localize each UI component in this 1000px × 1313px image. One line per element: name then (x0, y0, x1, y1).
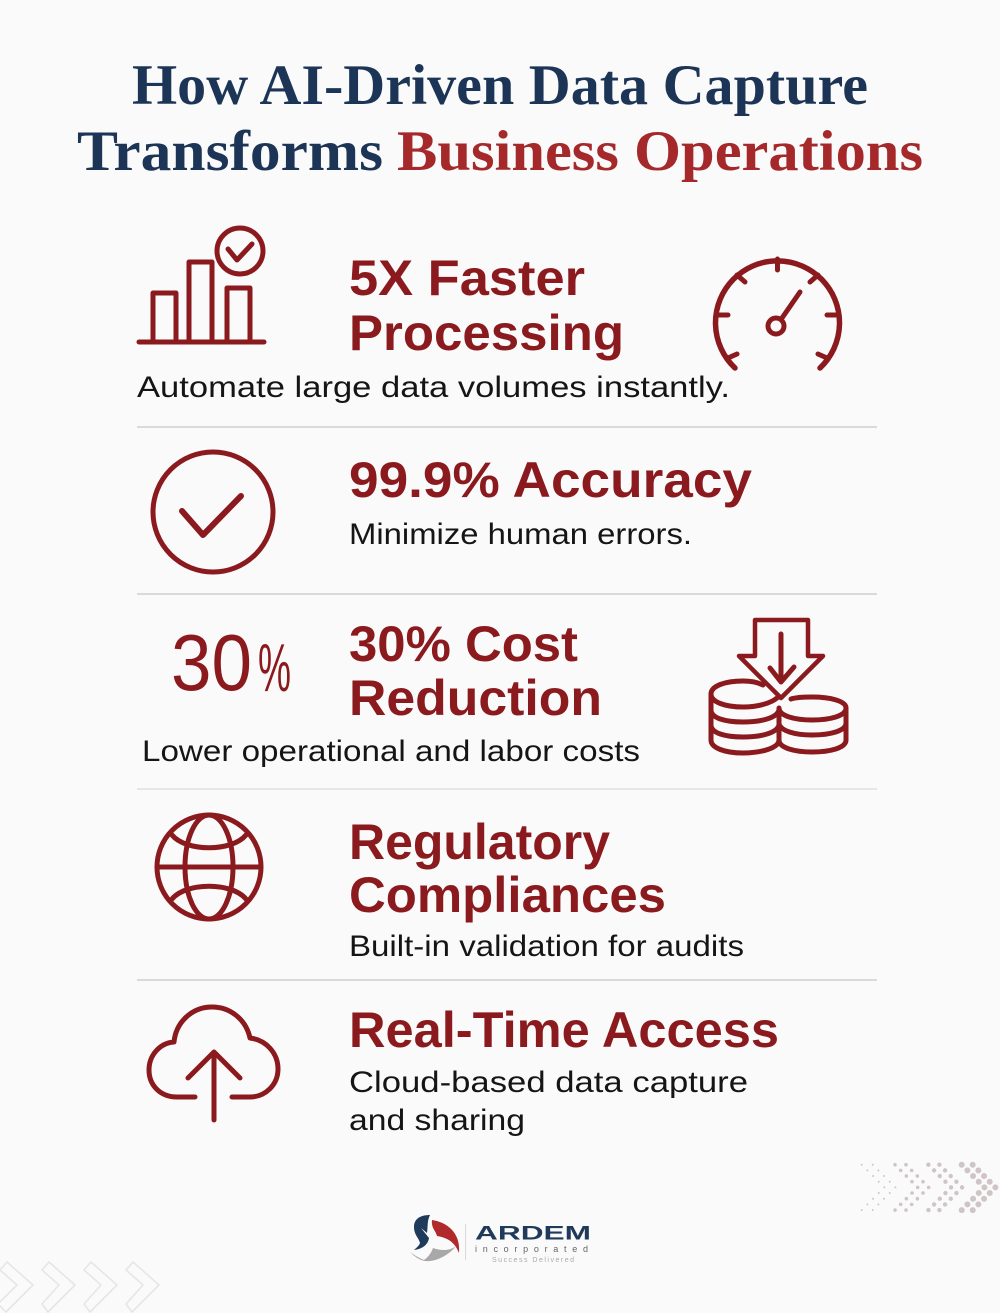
icon: 30 percent: % (258, 630, 291, 706)
icon: logo flame mark (410, 1215, 459, 1261)
icon: bar chart with check badge (139, 228, 264, 342)
title: How AI-Driven Data Capture (132, 54, 868, 117)
heading: 5X Faster Processing: Processing (349, 305, 624, 361)
icon: down arrow over coin stacks (711, 620, 846, 753)
title: Business Operations (397, 120, 923, 183)
heading: Regulatory Compliances (349, 814, 666, 923)
panel: 99.9% accuracy (153, 452, 752, 572)
decoration: outlined chevrons (0, 1262, 159, 1312)
heading: 5X Faster Processing (349, 250, 624, 361)
logo: ARDEM incorporated (410, 1215, 591, 1264)
panel: real-time access (149, 1002, 779, 1137)
panel: 30% cost reduction (142, 616, 846, 768)
logo tagline: Success Delivered (492, 1257, 574, 1264)
text: cloud-based capture (349, 1066, 748, 1137)
text: automate: Automate large data volumes instantly. (137, 371, 730, 404)
heading: 99.9% Accuracy: 99.9% Accuracy (349, 452, 752, 508)
text: built-in validation: Built-in validation for audits (349, 930, 744, 963)
logo subtitle: incorporated (475, 1244, 588, 1254)
text: lower costs: Lower operational and labor costs (142, 735, 640, 768)
heading: Real-Time Access: Real-Time Access (349, 1002, 779, 1058)
title (77, 54, 923, 183)
icon: cloud upload (149, 1007, 278, 1120)
heading: Regulatory Compliances: Compliances (349, 867, 666, 923)
title: Transforms (77, 120, 383, 183)
heading: Regulatory Compliances: Regulatory (349, 814, 610, 870)
icon: check circle (153, 452, 273, 572)
panel: 5X faster processing (137, 228, 840, 404)
heading: 30% Cost Reduction: 30% Cost (349, 616, 578, 672)
text: minimize: Minimize human errors. (349, 518, 692, 551)
icon: 30 percent: 30 (171, 618, 252, 707)
text: cloud-based capture: Cloud-based data capture (349, 1066, 748, 1099)
icon: globe (157, 815, 261, 919)
icon: speedometer gauge (716, 259, 840, 368)
logo wordmark: ARDEM (475, 1224, 591, 1244)
heading: 5X Faster Processing: 5X Faster (349, 250, 585, 306)
heading: 30% Cost Reduction: Reduction (349, 670, 602, 726)
heading: 30% Cost Reduction (349, 616, 602, 726)
decoration: dotted chevrons (862, 1165, 995, 1210)
text: cloud-based capture: and sharing (349, 1104, 525, 1137)
panel: regulatory compliances (157, 814, 744, 963)
